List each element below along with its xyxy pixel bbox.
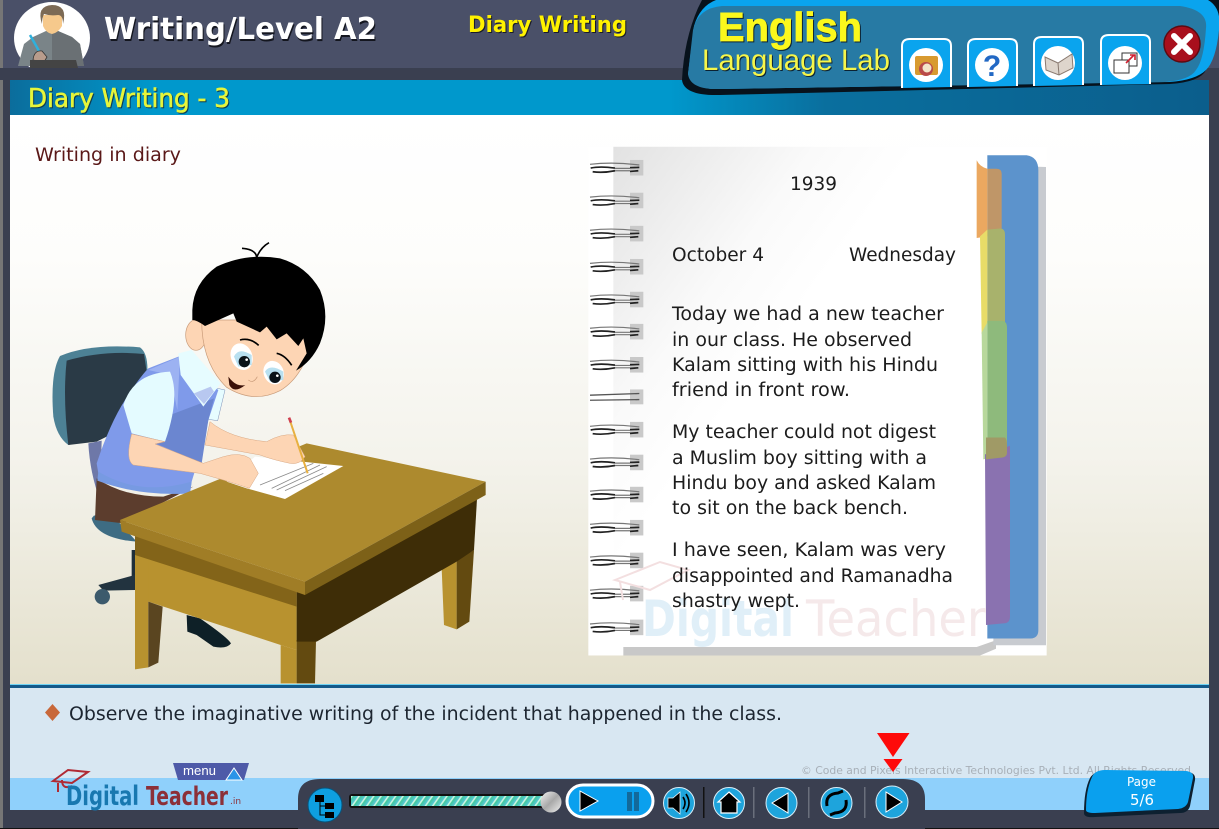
divider tabs (977, 160, 1010, 625)
logo: Digital Teacher: .in (230, 797, 241, 807)
boy torso (95, 350, 225, 523)
paragraph 2: to sit on the back bench. (672, 498, 908, 519)
panel: lesson content background (10, 115, 1209, 684)
divider (864, 787, 866, 818)
paragraph 2: My teacher could not digest (672, 422, 936, 443)
panel: diary notebook (588, 147, 1047, 655)
divider (808, 787, 810, 818)
divider (753, 787, 754, 818)
spiral binding (590, 160, 643, 635)
button: sound (664, 788, 694, 818)
paragraph 1: in our class. He observed (672, 330, 912, 351)
menu tab: menu (183, 764, 216, 778)
back cover (987, 155, 1046, 645)
paragraph 1: Kalam sitting with his Hindu (672, 355, 938, 376)
diary entry text (671, 174, 956, 612)
illustration: boy writing at desk (52, 243, 486, 683)
collar (178, 350, 221, 407)
paragraph 1 (671, 304, 944, 401)
English wordmark: English (718, 4, 862, 50)
sleeve (123, 372, 174, 442)
paragraph 1: friend in front row. (672, 380, 850, 401)
progress bar (349, 792, 562, 812)
button: replay (821, 788, 852, 818)
date: October 4 (672, 245, 764, 266)
paragraph 3: shastry wept. (672, 591, 800, 612)
chair (52, 346, 147, 604)
red arrow pointer (877, 733, 910, 772)
paragraph 2: Hindu boy and asked Kalam (672, 473, 936, 494)
paragraph 3 (672, 540, 953, 612)
paragraph 3: I have seen, Kalam was very (672, 540, 946, 561)
paragraph 2 (672, 422, 936, 519)
button: home (714, 788, 744, 818)
paragraph 2: a Muslim boy sitting with a (672, 448, 927, 469)
pencil (289, 418, 308, 473)
page number: 5/6 (1130, 791, 1154, 809)
icon: student avatar (0, 2, 120, 80)
paragraph 3: disappointed and Ramanadha (672, 566, 953, 587)
tab: history (902, 39, 951, 88)
watermark: Digital Teacher: Teacher (805, 590, 986, 648)
tab: window (1101, 35, 1150, 85)
watermark: Digital Teacher: Digital (642, 590, 794, 648)
paper (227, 457, 343, 499)
logo: Digital Teacher: Digital (66, 781, 139, 812)
tab: book (1034, 37, 1083, 86)
lesson title bar (10, 80, 1209, 115)
head (186, 243, 325, 397)
desk (120, 443, 486, 683)
tab: help: ? (983, 50, 1001, 83)
divider (703, 787, 704, 818)
paper sheet (588, 147, 1047, 655)
panel: playback controls (298, 779, 925, 829)
lesson title bar: Diary Writing - 3 (28, 84, 230, 114)
heading: topic: Diary Writing (468, 13, 627, 38)
button: contents (308, 788, 342, 822)
far arm (205, 422, 305, 464)
Language Lab wordmark: Language Lab (702, 44, 890, 77)
icon: bullet (45, 704, 60, 721)
panel: English Language Lab header (682, 0, 1219, 95)
weekday: Wednesday (849, 245, 956, 266)
instruction text: Observe the imaginative writing of the incident that happened in the class. (69, 704, 782, 725)
shirt front (208, 387, 225, 421)
button: next (876, 786, 908, 818)
copyright: © Code and Pixels Interactive Technologies Pvt. Ltd. All Rights Reserved (801, 764, 1191, 777)
near arm (129, 434, 258, 488)
menu tab (173, 763, 249, 780)
icon: close (1164, 26, 1200, 62)
heading: level: Writing/Level A2 (104, 12, 377, 47)
year: 1939 (790, 174, 837, 195)
page indicator (1084, 770, 1195, 817)
shoe (187, 615, 231, 647)
logo: Digital Teacher: Teacher (146, 782, 228, 812)
button: play and pause (567, 785, 653, 817)
paragraph 1: Today we had a new teacher (671, 304, 944, 325)
caption: writing in diary: Writing in diary (35, 145, 181, 166)
arms, paper and pencil (129, 418, 343, 499)
panel: instruction strip (10, 684, 1209, 810)
tab: help (968, 39, 1017, 87)
trousers (95, 478, 193, 523)
button: back (766, 788, 797, 818)
vest (97, 356, 218, 494)
watermark: Digital Teacher (615, 562, 986, 648)
logo: Digital Teacher (53, 770, 241, 812)
page label: Page (1127, 774, 1156, 789)
